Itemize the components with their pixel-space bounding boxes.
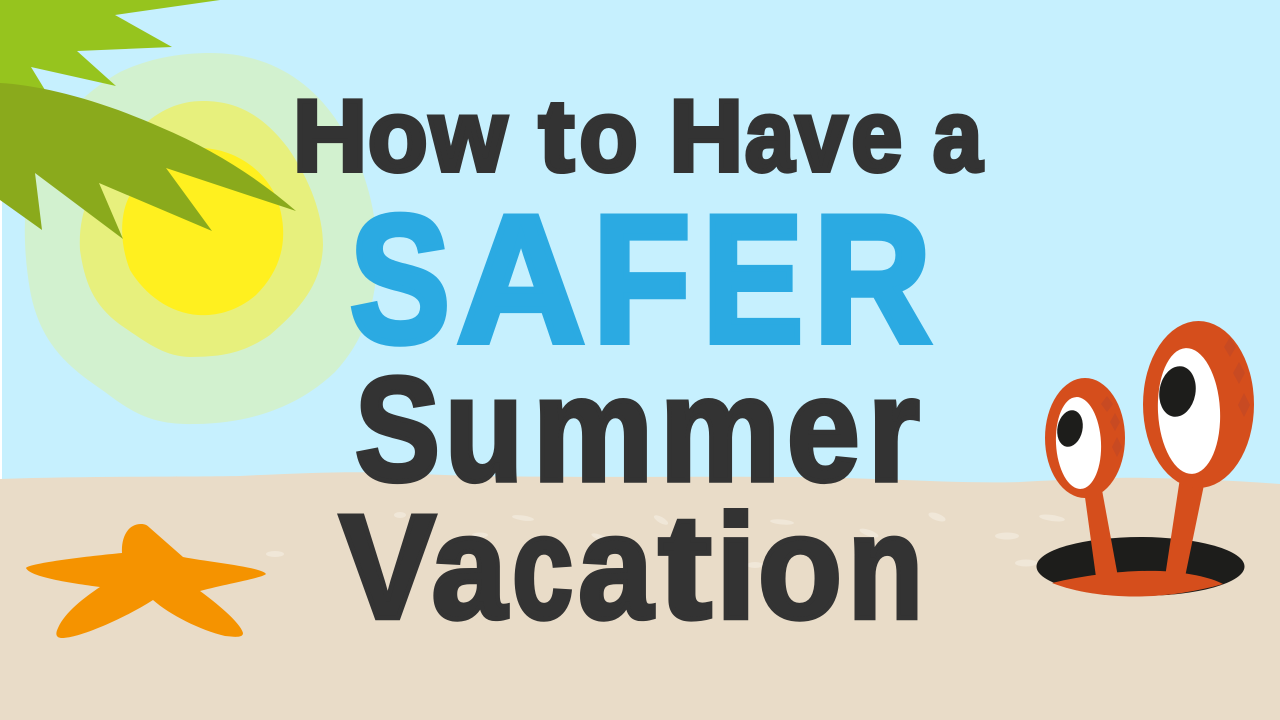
title line: SAFER: R [814, 178, 931, 380]
title line: Summer: S [355, 347, 440, 512]
title [293, 80, 983, 650]
crab body [1052, 571, 1223, 596]
sun outer glow [25, 53, 377, 424]
crab in hole [1036, 321, 1254, 596]
title line: How to Have a: e [852, 80, 902, 192]
title line: Vacation: t [658, 485, 712, 650]
left eye stalk [1084, 490, 1118, 577]
sun [25, 53, 377, 424]
hole [1036, 537, 1244, 596]
title line: How to Have a: a [745, 80, 795, 192]
starfish [26, 524, 266, 638]
right eye stalk [1165, 478, 1205, 577]
title line: Summer: m [533, 347, 653, 512]
title line: SAFER: A [457, 178, 585, 380]
title line: Vacation: n [848, 485, 923, 650]
sun core [122, 148, 283, 315]
title line: Summer: r [868, 347, 920, 512]
title line: SAFER: E [702, 178, 803, 380]
title line: Vacation: a [578, 485, 654, 650]
palm leaf: upper [0, 0, 220, 100]
sun middle ring [80, 101, 323, 357]
sand specks [266, 511, 1065, 568]
title line: Vacation: c [512, 485, 573, 650]
title line: How to Have a: w [429, 80, 507, 192]
title line: How to Have a: a [933, 80, 983, 192]
title line: How to Have a: o [580, 80, 638, 192]
title line: Vacation: a [432, 485, 508, 650]
title line: Vacation: o [758, 485, 842, 650]
title line: SAFER: F [593, 178, 690, 380]
title line: Summer: u [445, 347, 523, 512]
palm leaf: lower [0, 83, 296, 239]
title line: Summer: m [660, 347, 780, 512]
title line: How to Have a: o [368, 80, 428, 192]
title line: How to Have a: t [539, 80, 574, 192]
left eye [1045, 378, 1125, 498]
title line: Summer: e [787, 347, 860, 512]
title line: SAFER: S [350, 178, 450, 380]
title line: How to Have a: H [670, 80, 743, 192]
title line: How to Have a: H [293, 80, 367, 192]
title line: How to Have a: v [796, 80, 847, 192]
title line: Vacation: V [340, 485, 436, 650]
sand ground [0, 472, 1280, 720]
sky background [2, 0, 1280, 490]
title line: Vacation: i [716, 485, 756, 650]
right eye [1143, 321, 1254, 488]
